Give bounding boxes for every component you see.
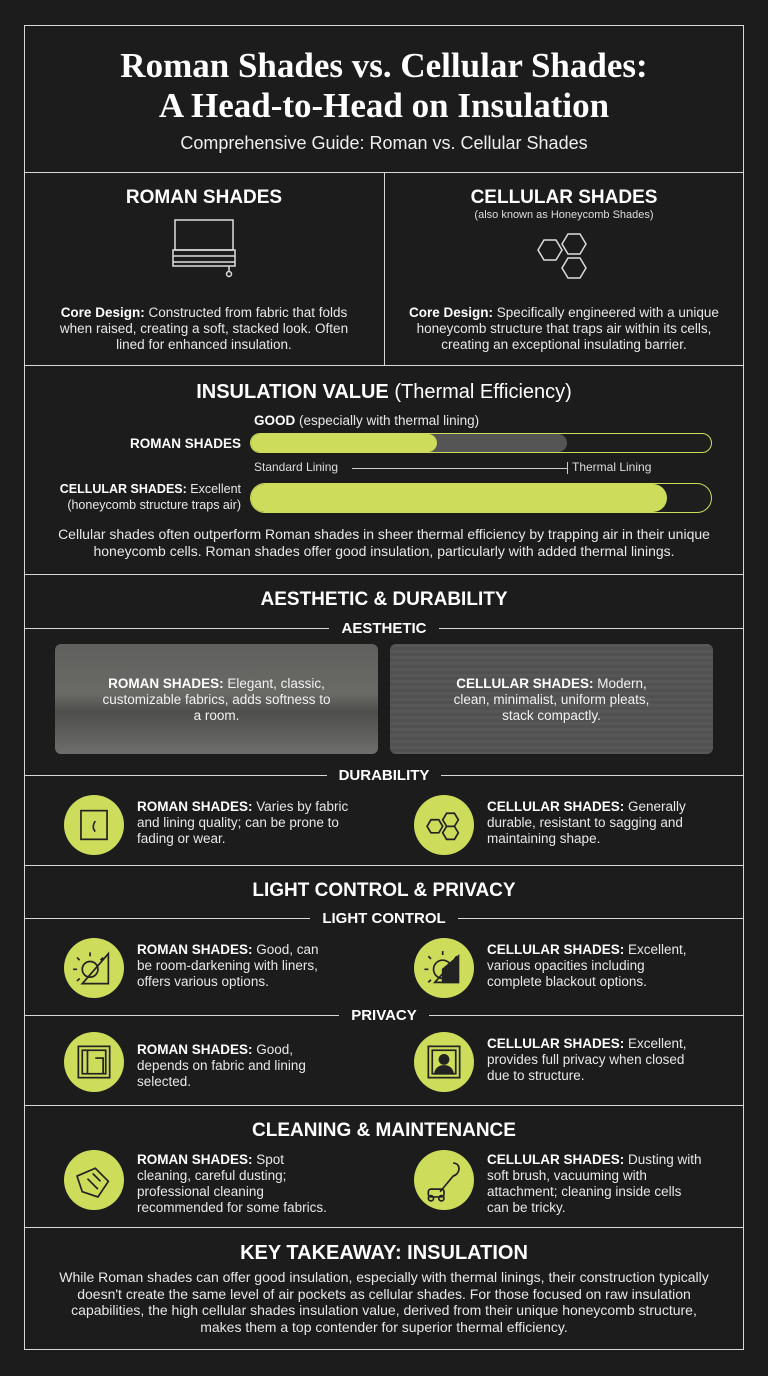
title: Roman Shades vs. Cellular Shades: — [120, 46, 648, 85]
label cellular — [60, 482, 241, 512]
image card roman — [55, 644, 378, 754]
icon: honeycomb — [537, 233, 587, 279]
heading aesthetic & durability: AESTHETIC & DURABILITY — [260, 589, 508, 610]
takeaway text: While Roman shades can offer good insulation, especially with thermal linings, their construction typically doesn't create the same level of air pockets as cellular shades. For those focused on raw insulation capabilities, the high cellular shades insulation value, derived from their unique honeycomb structure, makes them a top contender for superior thermal efficiency. — [59, 1269, 709, 1334]
label cellular: (honeycomb structure traps air) — [67, 498, 241, 512]
item: roman cleaning: ROMAN SHADES: Spot cleaning, careful dusting; professional cleaning recommended for some fabrics. — [137, 1152, 327, 1215]
subheading durability: DURABILITY — [339, 767, 429, 784]
bar: roman — [250, 433, 712, 453]
heading light control: LIGHT CONTROL & PRIVACY — [252, 880, 516, 901]
note: (also known as Honeycomb Shades) — [474, 209, 654, 221]
scale: lining: Thermal Lining — [572, 460, 651, 474]
item: roman light: ROMAN SHADES: Good, can be room-darkening with liners, offers various options. — [137, 942, 319, 989]
insulation summary: Cellular shades often outperform Roman shades in sheer thermal efficiency by trapping air in their unique honeycomb cells. Roman shades offer good insulation, particularly with added thermal linings. — [58, 526, 710, 559]
item: cellular durability: CELLULAR SHADES: Generally durable, resistant to sagging and maintaining shape. — [487, 799, 686, 846]
label roman: ROMAN SHADES — [130, 436, 241, 451]
heading roman: ROMAN SHADES — [126, 187, 282, 208]
item: roman light — [64, 938, 319, 998]
heading cleaning: CLEANING & MAINTENANCE — [252, 1120, 516, 1141]
item: cellular durability — [414, 795, 686, 855]
label cellular: CELLULAR SHADES: Excellent — [60, 482, 241, 496]
subheading privacy: PRIVACY — [351, 1007, 417, 1024]
heading cellular: CELLULAR SHADES — [471, 187, 657, 208]
item: cellular cleaning: CELLULAR SHADES: Dusting with soft brush, vacuuming with attachment; cleaning inside cells can be tricky. — [487, 1152, 702, 1215]
subheading light control: LIGHT CONTROL — [322, 910, 446, 927]
panel: roman shades — [60, 187, 348, 352]
item: cellular privacy: CELLULAR SHADES: Excellent, provides full privacy when closed due to structure. — [487, 1036, 687, 1083]
bar: cellular — [250, 483, 712, 513]
image card cellular: CELLULAR SHADES: Modern, clean, minimalist, uniform pleats, stack compactly. — [454, 676, 649, 723]
image card roman: ROMAN SHADES: Elegant, classic, customizable fabrics, adds softness to a room. — [102, 676, 331, 723]
panel: insulation value — [58, 381, 712, 559]
text cellular core: Core Design: Specifically engineered with a unique honeycomb structure that traps air within its cells, creating an exceptional insulating barrier. — [409, 305, 719, 352]
subtitle: Comprehensive Guide: Roman vs. Cellular Shades — [180, 133, 588, 153]
heading key takeaway: KEY TAKEAWAY: INSULATION — [240, 1242, 528, 1264]
heading insulation: INSULATION VALUE (Thermal Efficiency) — [196, 381, 572, 403]
item: cellular light — [414, 938, 687, 998]
item: roman durability — [64, 795, 348, 855]
text roman core: Core Design: Constructed from fabric that folds when raised, creating a soft, stacked look. Often lined for enhanced insulation. — [60, 305, 348, 352]
subheading aesthetic: AESTHETIC — [341, 620, 426, 637]
title: A Head-to-Head on Insulation — [159, 86, 609, 125]
icon: roman shade — [172, 219, 236, 278]
item: roman privacy: ROMAN SHADES: Good, depends on fabric and lining selected. — [137, 1042, 306, 1089]
item: roman durability: ROMAN SHADES: Varies by fabric and lining quality; can be prone to fading or wear. — [137, 799, 348, 846]
item: cellular light: CELLULAR SHADES: Excellent, various opacities including complete blackout options. — [487, 942, 687, 989]
scale: lining: Standard Lining — [254, 460, 338, 474]
scale: lining — [254, 460, 651, 474]
image card cellular — [390, 644, 713, 754]
panel: cellular shades — [409, 187, 719, 352]
title — [120, 46, 648, 125]
item: cellular privacy — [414, 1032, 687, 1092]
item: roman privacy — [64, 1032, 306, 1092]
label good: GOOD (especially with thermal lining) — [254, 413, 479, 428]
